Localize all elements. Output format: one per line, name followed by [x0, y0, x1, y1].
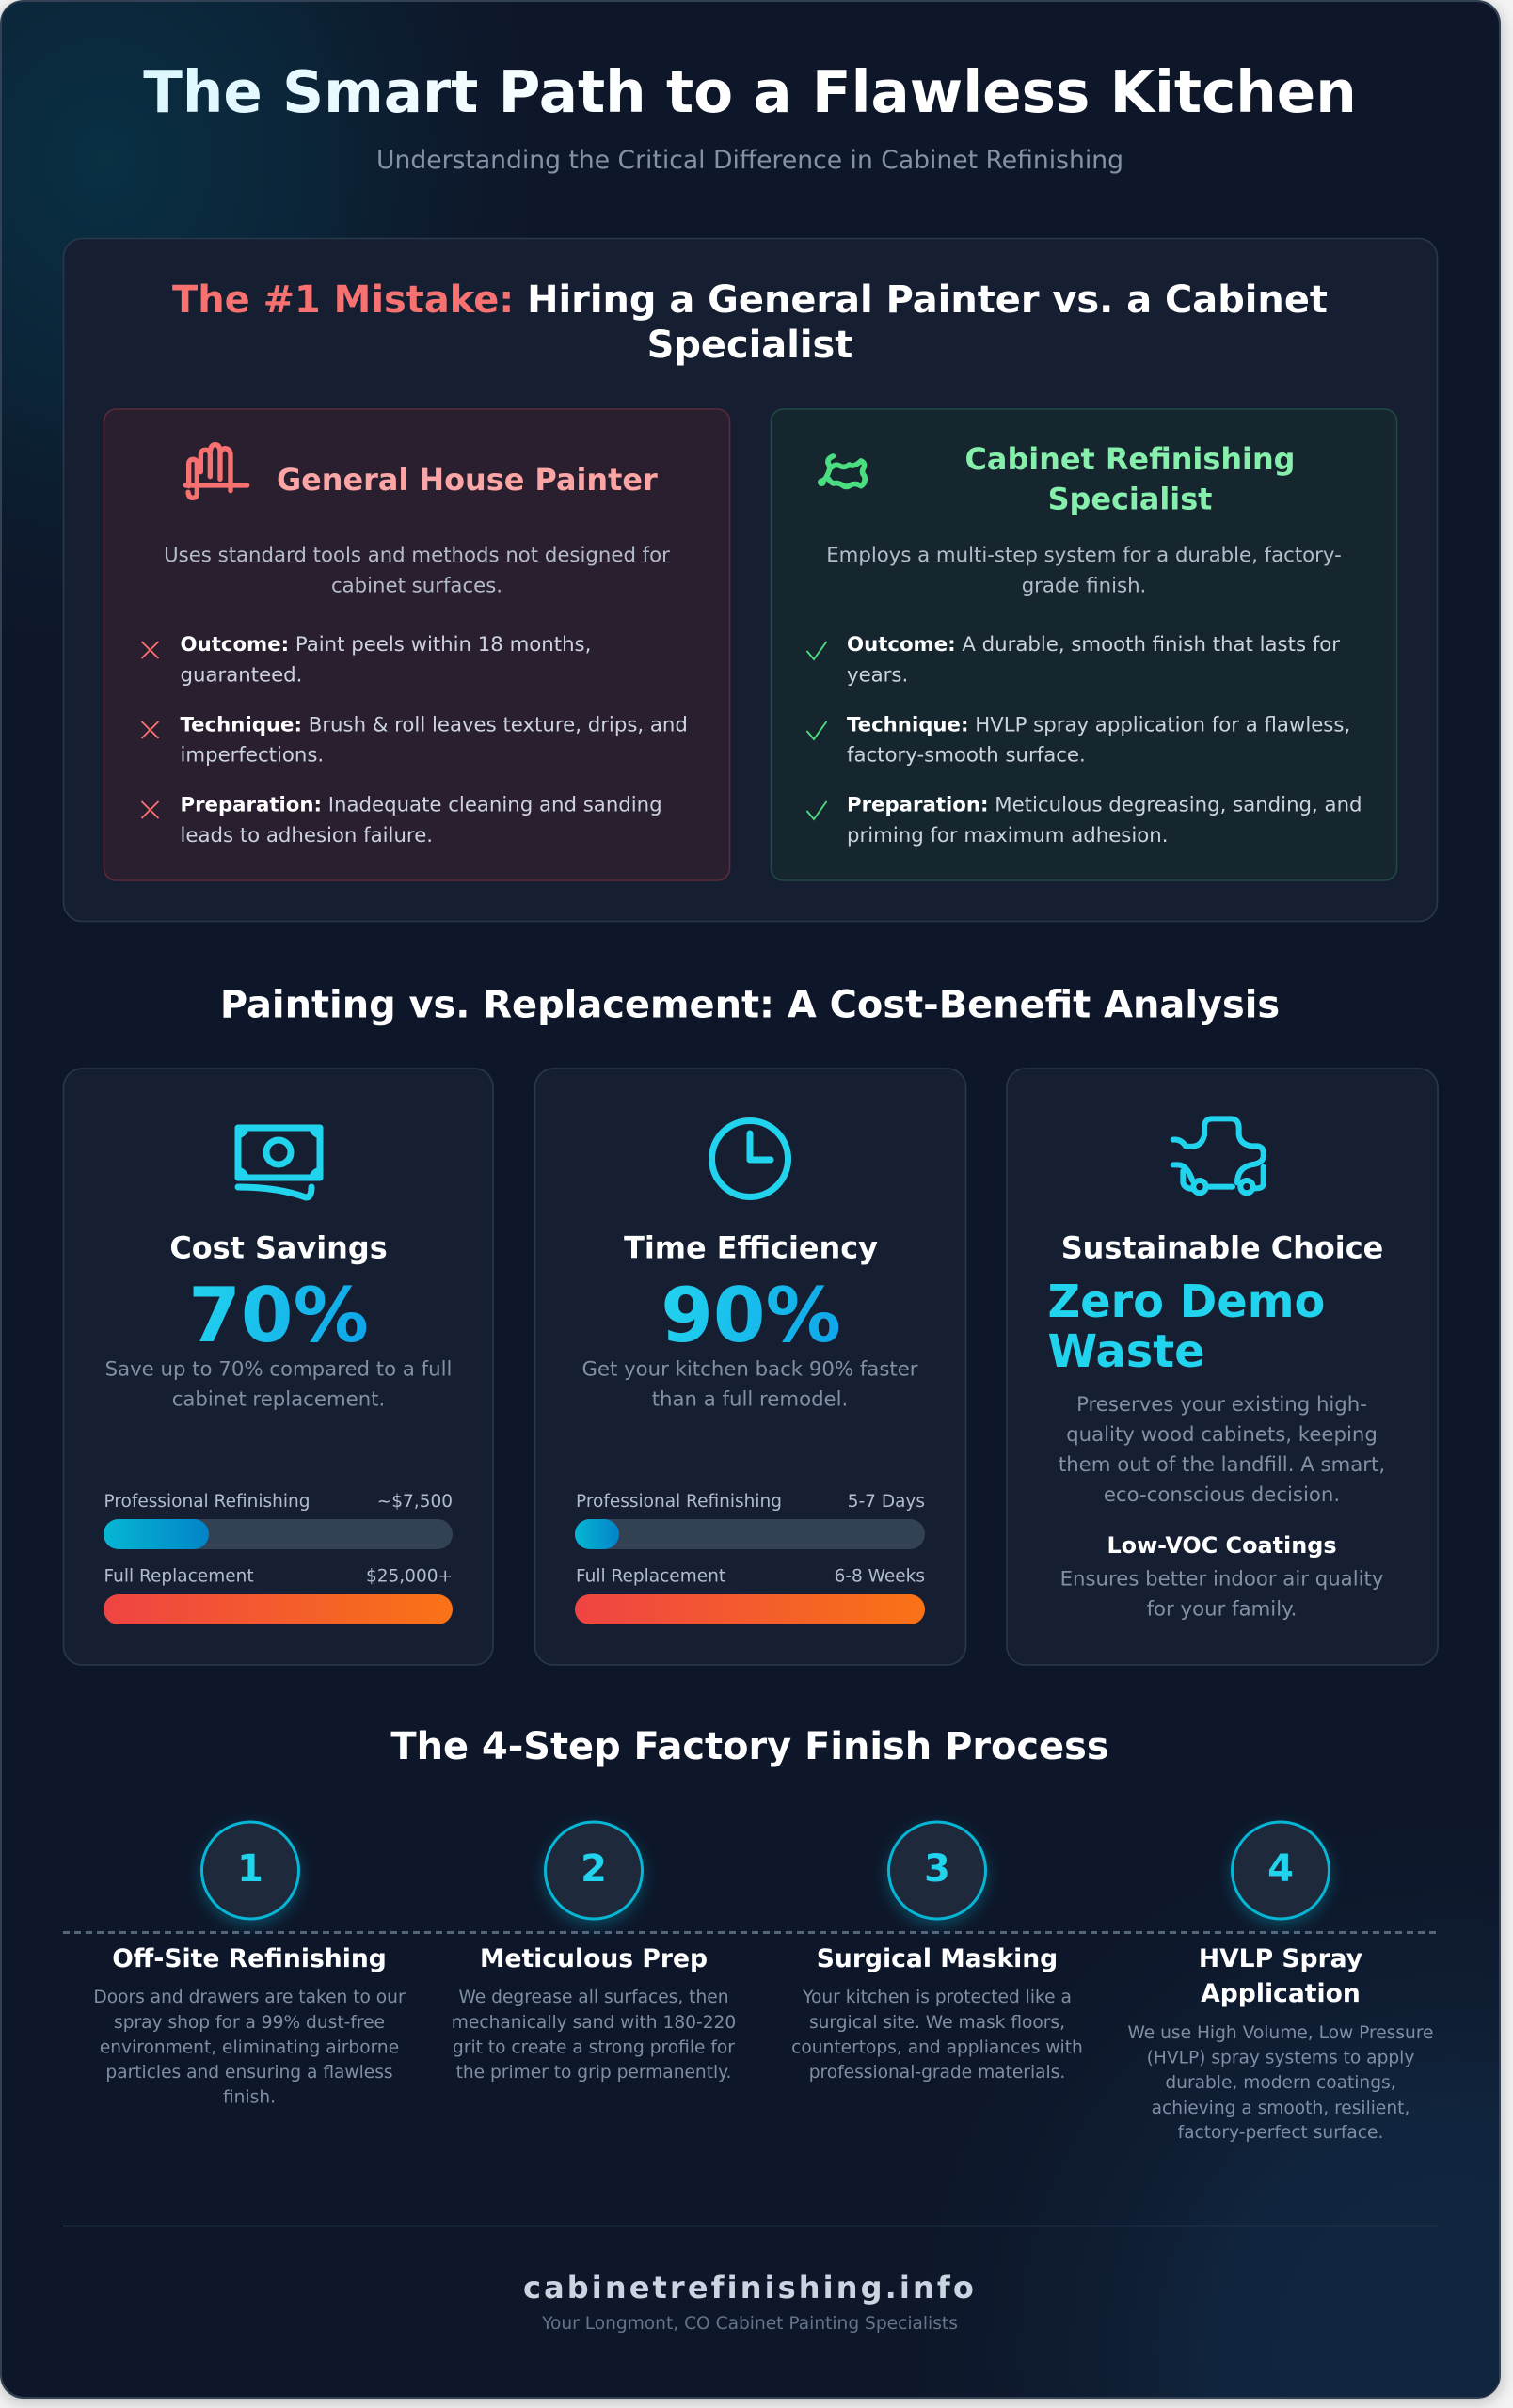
step number 1: 1	[237, 1847, 263, 1891]
description: than a full remodel.	[652, 1388, 848, 1411]
bar chart: cost: Full Replacement	[104, 1567, 254, 1586]
bar chart: time: 5-7 Days	[848, 1492, 925, 1512]
stat: 90%: 90%	[661, 1272, 841, 1359]
description: for your family.	[1147, 1597, 1297, 1622]
step title: Meticulous Prep	[480, 1944, 708, 1973]
icon: clock	[711, 1121, 788, 1196]
list: specialist points: priming for maximum adhesion.	[847, 824, 1169, 848]
footer: website: cabinetrefinishing.info	[523, 2270, 977, 2305]
step title: HVLP Spray	[1199, 1944, 1362, 1973]
subtitle: Understanding the Critical Difference in Cabinet Refinishing	[376, 146, 1123, 175]
step title: Application	[1201, 1979, 1361, 2008]
step number 4: 4	[1267, 1847, 1294, 1891]
panel: time efficiency	[534, 1069, 965, 1665]
step 3	[791, 1822, 1083, 2083]
step number 3: 3	[924, 1847, 950, 1891]
list: specialist points: years.	[847, 664, 908, 687]
list: painter points: leads to adhesion failure.	[181, 824, 433, 848]
description: cabinet replacement.	[172, 1388, 385, 1411]
heading: cabinet refinishing specialist: Specialist	[1048, 482, 1212, 517]
step description: mechanically sand with 180-220	[452, 2013, 736, 2033]
step description: Your kitchen is protected like a	[802, 1988, 1072, 2007]
description: quality wood cabinets, keeping	[1066, 1423, 1378, 1447]
step number 2: 2	[581, 1847, 607, 1891]
panel: cost savings	[64, 1069, 493, 1665]
icon: truck	[1173, 1118, 1264, 1193]
title: The Smart Path to a Flawless Kitchen	[143, 59, 1357, 126]
step 4	[1127, 1822, 1434, 2143]
stat: zero demo waste: Zero Demo	[1048, 1276, 1325, 1328]
subheading: low-voc coatings: Low-VOC Coatings	[1107, 1532, 1337, 1559]
heading: the #1 mistake: The #1 Mistake: Hiring a General Painter vs. a Cabinet	[172, 278, 1328, 322]
bar chart: cost: ~$7,500	[377, 1492, 453, 1512]
card title: Time Efficiency	[624, 1230, 878, 1266]
list: specialist points: Preparation: Meticulous degreasing, sanding, and	[847, 794, 1362, 816]
step 2	[452, 1822, 736, 2083]
list: specialist points: Technique: HVLP spray application for a flawless,	[847, 713, 1350, 737]
step description: We use High Volume, Low Pressure	[1127, 2023, 1434, 2043]
description: Preserves your existing high-	[1076, 1393, 1367, 1417]
description: Save up to 70% compared to a full	[105, 1358, 452, 1381]
step 1	[93, 1822, 406, 2107]
step description: environment, eliminating airborne	[100, 2037, 399, 2058]
step description: finish.	[223, 2088, 276, 2107]
description: Ensures better indoor air quality	[1060, 1567, 1383, 1592]
step description: We degrease all surfaces, then	[459, 1988, 728, 2007]
card title: Cost Savings	[169, 1230, 388, 1266]
description: grade finish.	[1022, 574, 1146, 598]
description: cabinet surfaces.	[331, 574, 502, 598]
step title: Surgical Masking	[817, 1944, 1058, 1973]
footer: tagline: Your Longmont, CO Cabinet Painting Specialists	[541, 2314, 958, 2334]
step description: (HVLP) spray systems to apply	[1147, 2049, 1414, 2067]
list: painter points: imperfections.	[181, 743, 324, 768]
step number 1	[201, 1822, 299, 1925]
bar chart: cost	[104, 1492, 453, 1624]
bar chart: time: 6-8 Weeks	[835, 1567, 925, 1586]
step number 2	[545, 1822, 643, 1925]
step description: professional-grade materials.	[809, 2063, 1065, 2083]
card: cabinet refinishing specialist	[772, 409, 1396, 880]
list: painter points: Technique: Brush & roll leaves texture, drips, and	[181, 713, 688, 737]
list: painter points: Preparation: Inadequate cleaning and sanding	[181, 794, 662, 816]
footer	[523, 2270, 977, 2334]
step number 4	[1232, 1822, 1330, 1925]
icon: spray squiggle	[818, 456, 865, 486]
bar chart: cost: $25,000+	[366, 1567, 453, 1586]
description: eco-conscious decision.	[1104, 1483, 1340, 1507]
card title: Sustainable Choice	[1061, 1230, 1383, 1266]
step title: Off-Site Refinishing	[112, 1944, 387, 1973]
icons: check marks	[807, 642, 826, 819]
step description: countertops, and appliances with	[791, 2037, 1083, 2058]
step number 3	[888, 1822, 986, 1925]
step description: spray shop for a 99% dust-free	[114, 2013, 385, 2033]
step description: the primer to grip permanently.	[456, 2063, 731, 2083]
icons: cross marks	[141, 642, 158, 818]
list: painter points: Outcome: Paint peels within 18 months,	[181, 633, 591, 657]
step description: surgical site. We mask floors,	[809, 2013, 1065, 2033]
list: specialist points: factory-smooth surface.	[847, 743, 1086, 768]
heading: cost-benefit analysis: Painting vs. Replacement: A Cost-Benefit Analysis	[220, 984, 1280, 1027]
step description: grit to create a strong profile for	[453, 2037, 735, 2058]
description: Uses standard tools and methods not designed for	[164, 544, 670, 567]
step description: Doors and drawers are taken to our	[93, 1988, 406, 2007]
list: painter points: guaranteed.	[181, 664, 302, 687]
heading: cabinet refinishing specialist: Cabinet Refinishing	[965, 441, 1295, 477]
stat: zero demo waste: Waste	[1048, 1326, 1204, 1378]
heading: the #1 mistake: Specialist	[647, 324, 852, 367]
description: Get your kitchen back 90% faster	[581, 1358, 918, 1381]
description: Employs a multi-step system for a durable, factory-	[826, 544, 1342, 567]
panel: the #1 mistake	[64, 239, 1438, 922]
step description: durable, modern coatings,	[1165, 2073, 1396, 2093]
card: general house painter	[104, 409, 730, 880]
panel: sustainable choice	[1007, 1069, 1438, 1665]
description: them out of the landfill. A smart,	[1059, 1453, 1385, 1477]
bar chart: cost: Professional Refinishing	[104, 1492, 310, 1512]
icon: banknote	[238, 1128, 320, 1197]
bar chart: time: Full Replacement	[576, 1567, 725, 1586]
heading: general house painter: General House Painter	[277, 462, 658, 498]
bar chart: time	[575, 1492, 925, 1624]
list: specialist points: Outcome: A durable, smooth finish that lasts for	[847, 633, 1340, 657]
stat: 70%: 70%	[188, 1272, 369, 1359]
step description: particles and ensuring a flawless	[105, 2063, 393, 2083]
bar chart: time: Professional Refinishing	[576, 1492, 782, 1512]
heading: process: The 4-Step Factory Finish Process	[390, 1725, 1109, 1768]
step description: achieving a smooth, resilient,	[1152, 2099, 1409, 2118]
step description: factory-perfect surface.	[1178, 2123, 1383, 2143]
icon: hand	[185, 445, 247, 498]
